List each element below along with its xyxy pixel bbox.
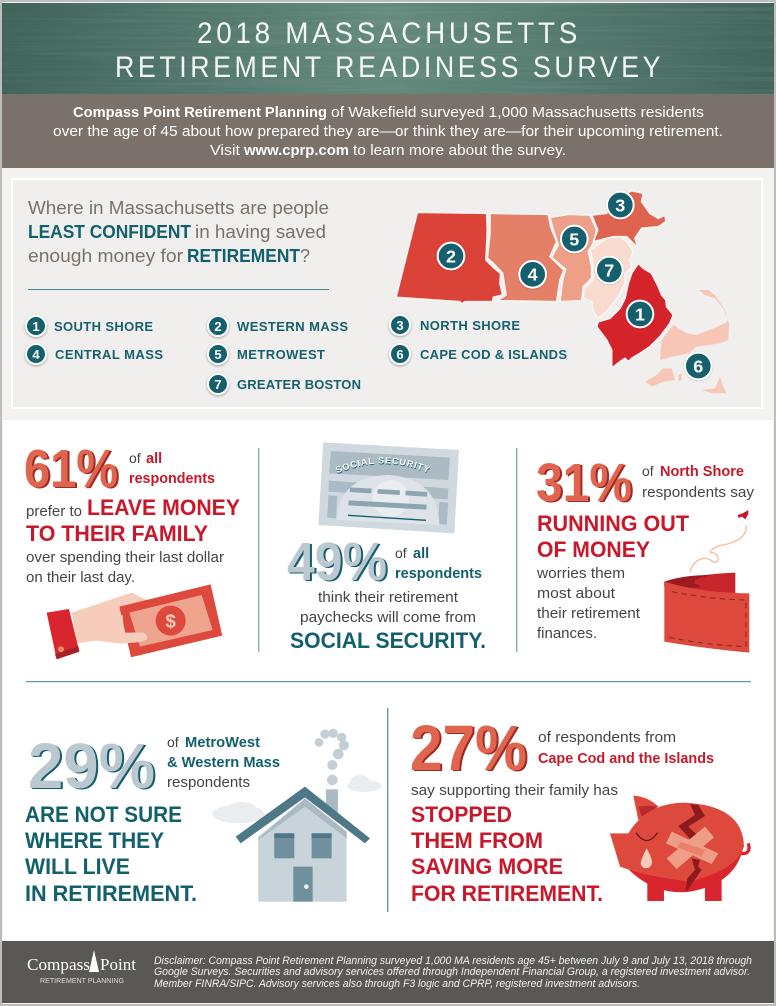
map legend: SOUTH SHORE — [54, 319, 153, 334]
panel: 31% running out of money: most about — [537, 585, 616, 602]
stat 49%: 49% — [289, 533, 389, 593]
panel: 49% social security: all — [413, 546, 429, 562]
panel: 31% running out of money: their retirement — [537, 605, 641, 622]
map number badges: 6 — [693, 356, 703, 376]
panel: 31% running out of money: of — [642, 463, 654, 479]
panel: 27% stopped them from saving: of respondents from — [538, 729, 676, 746]
panel: 49% social security: SOCIAL SECURITY. — [290, 628, 486, 653]
panel: 29% not sure where they will live: of — [167, 734, 179, 750]
panel: 27% stopped them from saving — [410, 712, 749, 906]
map number badges: 2 — [446, 246, 456, 266]
panel: 49% social security — [287, 442, 486, 653]
panel: 27% stopped them from saving: Cape Cod and the Islands — [538, 751, 714, 767]
panel: 31% running out of money: OF MONEY — [537, 537, 650, 562]
map number badges: 5 — [569, 229, 579, 249]
question heading: enough money for — [28, 246, 183, 266]
intro band — [2, 94, 774, 168]
map number badges — [438, 192, 712, 379]
panel: 27% stopped them from saving: say supporting their family has — [411, 782, 618, 799]
icon: social security card: SOCIAL SECURITY — [336, 458, 430, 474]
intro band: Compass Point Retirement Planning — [73, 104, 327, 121]
map legend: 1 — [32, 319, 40, 334]
intro band: of Wakefield surveyed 1,000 Massachusetts residents — [331, 104, 704, 121]
stat 49%: 49% — [287, 532, 387, 592]
icon: broken piggy bank — [610, 796, 749, 901]
map legend: 3 — [396, 318, 404, 333]
question heading: Where in Massachusetts are people — [28, 198, 329, 218]
intro band: to learn more about the survey. — [353, 142, 566, 159]
panel: 29% not sure where they will live: WHERE THEY — [25, 828, 164, 853]
intro band: over the age of 45 about how prepared they are—or think they are—for their upcoming retirement. — [53, 123, 723, 140]
panel: 29% not sure where they will live: IN RETIREMENT. — [25, 881, 197, 906]
icon: house with question mark smoke — [212, 729, 382, 902]
panel: 61% leave money: on their last day. — [26, 569, 135, 586]
icon: social security card — [318, 442, 459, 534]
title — [115, 17, 664, 84]
panel: 49% social security: of — [395, 545, 407, 561]
panel: 61% leave money: prefer to — [26, 503, 82, 520]
disclaimer: Disclaimer: Compass Point Retirement Planning surveyed 1,000 MA residents age 45+ between July 9 and July 13, 2018 through — [154, 955, 752, 967]
map number badges: 1 — [635, 304, 645, 324]
panel: 27% stopped them from saving: THEM FROM — [411, 828, 543, 853]
region: south shore — [597, 263, 673, 368]
panel: 31% running out of money: North Shore — [660, 464, 744, 480]
map of Massachusetts — [396, 191, 729, 393]
map legend: 6 — [396, 347, 404, 362]
panel: 61% leave money: of — [129, 450, 141, 466]
panel: 61% leave money: over spending their last dollar — [26, 549, 224, 566]
panel: 31% running out of money: RUNNING OUT — [537, 511, 689, 536]
panel: 27% stopped them from saving: SAVING MORE — [411, 854, 563, 879]
region: western mass — [396, 212, 503, 304]
stat 29%: 29% — [28, 730, 155, 802]
panel: 29% not sure where they will live: & Western Mass — [167, 755, 280, 771]
logo — [27, 950, 136, 985]
map legend: 7 — [214, 377, 222, 392]
panel: 31% running out of money: finances. — [537, 625, 597, 642]
question heading — [28, 198, 329, 266]
panel: 27% stopped them from saving: FOR RETIREMENT. — [411, 881, 603, 906]
map legend: 4 — [32, 347, 40, 362]
region: metrowest — [550, 214, 597, 302]
region: greater boston — [583, 237, 633, 318]
header banner — [2, 3, 774, 94]
question heading: ? — [300, 246, 310, 266]
panel: 31% running out of money: respondents say — [642, 484, 754, 501]
panel: 61% leave money: TO THEIR FAMILY — [26, 521, 208, 546]
stat 29%: 29% — [30, 731, 157, 803]
disclaimer: Google Surveys. Securities and advisory services offered through Independent Financial Group, a registered investment advisor. — [154, 966, 750, 978]
stat 31%: 31% — [536, 453, 632, 513]
divider — [26, 681, 751, 682]
logo: Point — [100, 955, 136, 974]
stat 61%: 61% — [24, 439, 118, 499]
map number badges: 4 — [528, 265, 538, 285]
divider — [387, 708, 388, 912]
map legend: METROWEST — [237, 347, 325, 362]
panel: 27% stopped them from saving: STOPPED — [411, 802, 512, 827]
panel: 61% leave money: respondents — [129, 471, 215, 487]
panel: 61% leave money: LEAVE MONEY — [87, 495, 240, 520]
map legend: CAPE COD & ISLANDS — [420, 347, 567, 362]
panel: 29% not sure where they will live: WILL LIVE — [25, 854, 130, 879]
disclaimer: Member FINRA/SIPC. Advisory services also through F3 logic and CPRP, registered investment advisors. — [154, 978, 640, 990]
icon: hand holding money: $ — [165, 610, 176, 631]
map number badges: 7 — [604, 260, 614, 280]
disclaimer — [154, 955, 752, 990]
question heading: LEAST CONFIDENT — [28, 222, 191, 242]
stat 31%: 31% — [538, 454, 634, 514]
divider — [258, 448, 259, 652]
logo: Compass — [27, 955, 90, 974]
panel: map section — [2, 168, 774, 420]
map legend: CENTRAL MASS — [55, 347, 163, 362]
icon: hand holding money — [47, 584, 222, 659]
title: RETIREMENT READINESS SURVEY — [115, 51, 664, 84]
panel: 61% leave money — [24, 439, 240, 659]
panel: 29% not sure where they will live: MetroWest — [185, 735, 260, 751]
panel: 29% not sure where they will live: ARE NOT SURE — [25, 802, 182, 827]
map legend — [26, 315, 567, 394]
stat 27%: 27% — [410, 712, 527, 784]
region: cape cod and islands — [646, 290, 729, 393]
question heading: in having saved — [195, 222, 326, 242]
footer — [2, 941, 774, 1003]
panel: 49% social security: respondents — [395, 566, 482, 582]
stat 61%: 61% — [26, 440, 120, 500]
panel: 49% social security: think their retirement — [318, 589, 459, 606]
map legend: 5 — [214, 347, 222, 362]
stat 27%: 27% — [412, 713, 529, 785]
divider — [516, 448, 517, 652]
panel: 31% running out of money — [536, 453, 754, 653]
panel: 29% not sure where they will live: respondents — [167, 774, 250, 791]
title: 2018 MASSACHUSETTS — [197, 17, 581, 50]
intro band: Visit — [210, 142, 241, 159]
region: north shore — [592, 191, 666, 248]
logo: RETIREMENT PLANNING — [40, 978, 124, 985]
intro band: www.cprp.com — [243, 142, 349, 159]
panel: 49% social security: paychecks will come from — [300, 609, 476, 626]
map legend: 2 — [214, 319, 222, 334]
region: central mass — [487, 213, 564, 302]
panel: 61% leave money: all — [146, 451, 162, 467]
map legend: NORTH SHORE — [420, 318, 520, 333]
panel: 29% not sure where they will live — [25, 729, 382, 906]
map legend: WESTERN MASS — [237, 319, 348, 334]
icon: social security card: SOCIAL SECURITY — [336, 457, 430, 472]
icon: empty wallet with butterfly — [664, 510, 749, 653]
map legend: GREATER BOSTON — [237, 377, 361, 392]
panel: 31% running out of money: worries them — [536, 565, 625, 582]
question heading: RETIREMENT — [187, 246, 300, 266]
map number badges: 3 — [615, 195, 625, 215]
